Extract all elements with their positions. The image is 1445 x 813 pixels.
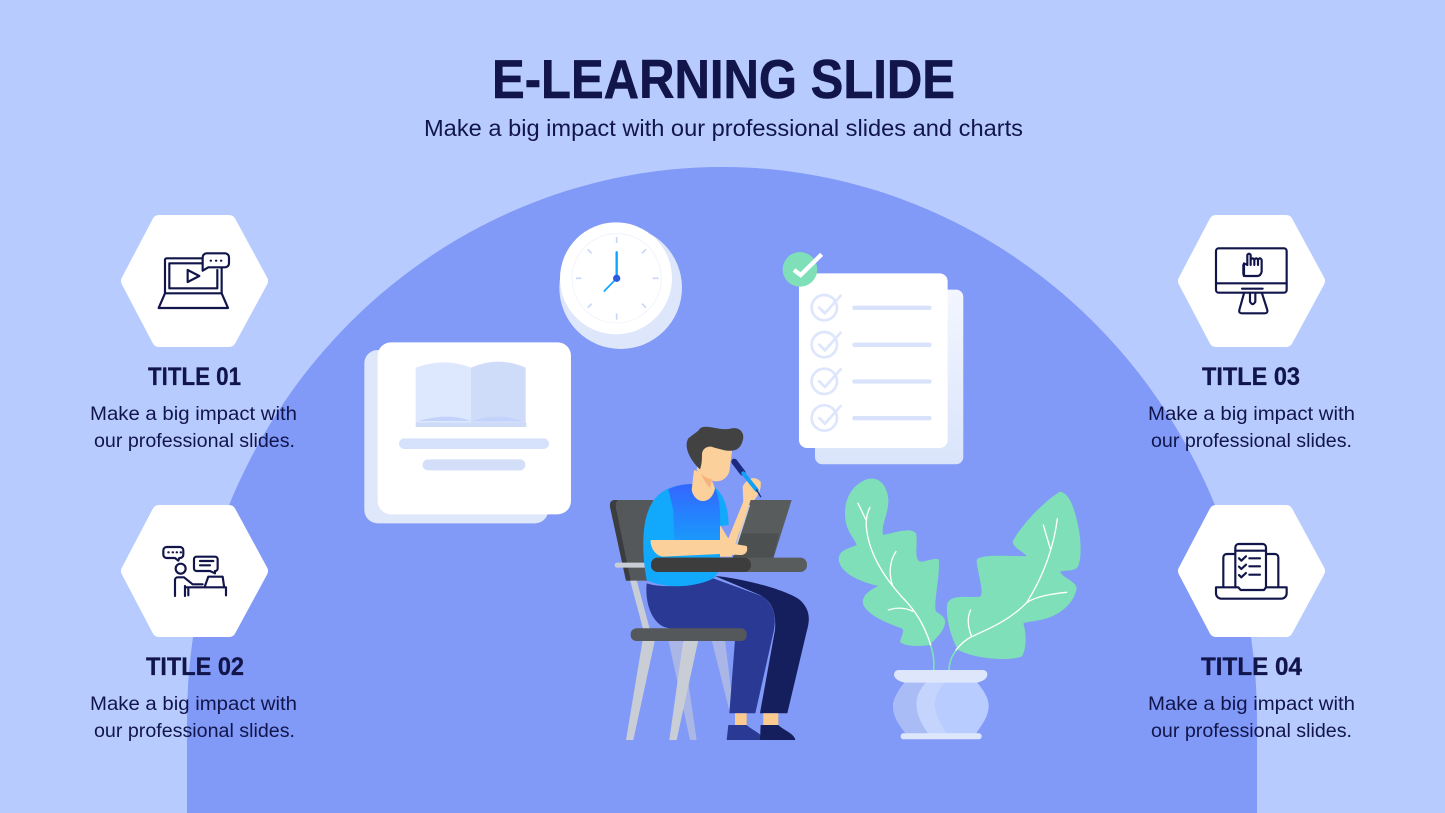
icon: green check badge xyxy=(783,252,822,287)
text block: Make a big impact with xyxy=(90,694,297,715)
stems xyxy=(930,643,957,671)
central arch xyxy=(187,167,1257,813)
pot xyxy=(893,670,989,739)
torso xyxy=(643,427,747,586)
laptop xyxy=(733,500,792,558)
heading: TITLE 01 xyxy=(148,363,241,391)
seat xyxy=(631,628,747,641)
clock and checklist xyxy=(559,222,963,464)
panel: title 03: our professional slides. xyxy=(1151,431,1352,452)
checklist paper xyxy=(799,273,963,464)
pen xyxy=(734,462,761,497)
hexagon xyxy=(1185,222,1318,340)
heading: TITLE 02 xyxy=(146,653,244,681)
panel: title 03 xyxy=(1148,222,1355,452)
panel: title 04 xyxy=(1148,512,1355,742)
raised arm xyxy=(720,478,761,557)
text block: Make a big impact with xyxy=(1148,694,1355,715)
panel: title 04: our professional slides. xyxy=(1151,721,1352,742)
icon: wall clock xyxy=(559,222,682,349)
book card xyxy=(364,342,571,523)
text block: Make a big impact with xyxy=(1148,404,1355,425)
icon: touch monitor xyxy=(1216,248,1287,313)
title: E-LEARNING SLIDE xyxy=(492,48,955,110)
hexagon xyxy=(1185,512,1318,630)
icon: checklist laptop xyxy=(1216,544,1287,599)
subtitle: Make a big impact with our professional slides and charts xyxy=(424,115,1023,141)
right leaf xyxy=(947,492,1081,659)
chair xyxy=(610,500,734,740)
icon: open book xyxy=(416,362,526,427)
icon: tutor at desk xyxy=(163,547,226,596)
hexagon xyxy=(128,512,261,630)
left leaf xyxy=(839,479,945,646)
panel: title 01: our professional slides. xyxy=(94,431,295,452)
icon: video laptop xyxy=(159,253,229,308)
panel: title 02: our professional slides. xyxy=(94,721,295,742)
hexagon xyxy=(128,222,261,340)
desk xyxy=(651,558,807,572)
heading: TITLE 04 xyxy=(1201,653,1302,681)
potted plant xyxy=(839,479,1081,739)
student at desk xyxy=(610,427,809,740)
heading: TITLE 03 xyxy=(1202,363,1300,391)
legs xyxy=(646,576,809,740)
panel: title 01 xyxy=(90,222,297,452)
panel: title 02 xyxy=(90,512,297,742)
text block: Make a big impact with xyxy=(90,404,297,425)
